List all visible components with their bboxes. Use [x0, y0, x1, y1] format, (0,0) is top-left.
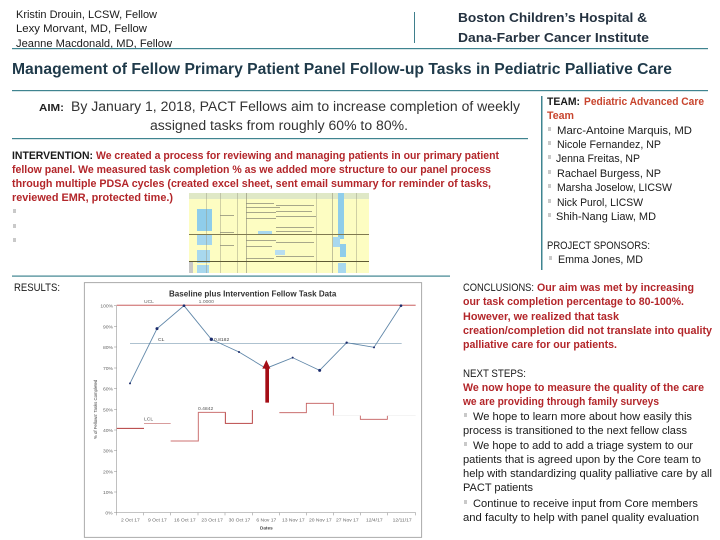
intervention text: reviewed EMR, protected time.) — [12, 192, 173, 204]
title: Management of Fellow Primary Patient Panel Follow-up Tasks in Pediatric Palliative Care — [12, 61, 672, 78]
x axis labels: 2 Oct 17 — [121, 517, 140, 523]
y axis with labels: 100% — [100, 304, 114, 310]
intervention text: through multiple PDSA cycles (created excel sheet, sent email summary for reminder of tasks, — [12, 178, 491, 190]
conclusions: Our aim was met by increasing — [537, 282, 694, 294]
aim statement: By January 1, 2018, PACT Fellows aim to increase completion of weekly — [71, 99, 520, 114]
team list — [547, 96, 704, 223]
x axis labels: 27 Nov 17 — [336, 517, 359, 523]
x axis labels — [121, 517, 412, 531]
y axis with labels: % of Fellows' Tasks Completed — [93, 379, 98, 439]
y axis with labels: 90% — [103, 324, 114, 330]
chart title: Baseline plus Intervention Fellow Task Data — [169, 290, 337, 299]
x axis labels: Dates — [260, 526, 273, 531]
y axis with labels: 20% — [103, 469, 114, 475]
next steps: and faculty to help with panel quality evaluation — [463, 512, 699, 524]
y axis with labels: 30% — [103, 449, 114, 455]
aim statement: AIM: — [39, 103, 64, 114]
y axis with labels: 40% — [103, 428, 114, 434]
authors — [16, 9, 172, 50]
authors: Jeanne Macdonald, MD, Fellow — [16, 38, 172, 50]
upper control limit — [117, 303, 416, 307]
y axis with labels: 0% — [105, 511, 113, 517]
next steps: NEXT STEPS: — [463, 368, 526, 380]
y axis with labels: 10% — [103, 490, 114, 496]
team list: TEAM: — [547, 96, 580, 108]
next steps: PACT patients — [463, 482, 533, 494]
team list: Nicole Fernandez, NP — [557, 139, 661, 151]
x axis labels: 12/11/17 — [393, 517, 412, 523]
data line — [129, 304, 402, 384]
x axis labels: 12/4/17 — [366, 517, 383, 523]
intervention text: INTERVENTION: — [12, 150, 93, 162]
data labels: 0.8182 — [214, 337, 229, 343]
team list: Shih-Nang Liaw, MD — [556, 211, 656, 223]
next steps: process is transitioned to the next fellow class — [463, 425, 687, 437]
next steps: help with standardizing quality palliative care by all — [463, 468, 712, 480]
task spreadsheet thumbnail — [189, 193, 369, 273]
next steps: We hope to add to add a triage system to our — [473, 440, 693, 452]
x axis labels: 23 Oct 17 — [201, 517, 223, 523]
team list: Team — [547, 110, 574, 122]
intervention text: fellow panel. We measured task completion % as we added more structure to our panel process — [12, 164, 491, 176]
x axis labels: 30 Oct 17 — [229, 517, 251, 523]
team list: Marc-Antoine Marquis, MD — [557, 125, 692, 137]
conclusions — [463, 282, 713, 351]
next steps: patients that is agreed upon by the Core team to — [463, 454, 701, 466]
institution heading — [458, 10, 649, 45]
x axis labels: 13 Nov 17 — [282, 517, 305, 523]
next steps: we are providing through family surveys — [462, 396, 659, 408]
project sponsors: Emma Jones, MD — [558, 254, 643, 266]
y axis with labels: 60% — [103, 387, 114, 393]
y axis with labels: 50% — [103, 407, 114, 413]
data labels — [144, 299, 229, 423]
intervention text: We created a process for reviewing and managing patients in our primary patient — [96, 150, 499, 162]
data labels: 0.4842 — [198, 406, 213, 412]
next steps: We now hope to measure the quality of the care — [463, 382, 704, 394]
x axis labels: 9 Oct 17 — [148, 517, 167, 523]
y axis with labels — [93, 304, 416, 517]
aim statement: assigned tasks from roughly 60% to 80%. — [150, 118, 408, 133]
intervention text — [12, 150, 499, 242]
next steps: We hope to learn more about how easily this — [473, 411, 692, 423]
team list: Nick Purol, LICSW — [557, 197, 644, 209]
conclusions: However, we realized that task — [463, 311, 620, 323]
data labels: 1.0000 — [199, 299, 214, 305]
lower control limit steps — [117, 403, 416, 441]
project sponsors: PROJECT SPONSORS: — [547, 240, 650, 252]
y axis with labels: 70% — [103, 366, 114, 372]
chart: baseline plus intervention fellow task data — [84, 283, 422, 537]
center line — [130, 342, 402, 344]
authors: Lexy Morvant, MD, Fellow — [16, 23, 147, 35]
team list: Pediatric Advanced Care — [584, 96, 704, 108]
conclusions: creation/completion did not translate into quality — [463, 325, 713, 337]
institution heading: Boston Children’s Hospital & — [458, 10, 647, 25]
x axis labels: 6 Nov 17 — [256, 517, 277, 523]
authors: Kristin Drouin, LCSW, Fellow — [16, 9, 157, 21]
team list: Jenna Freitas, NP — [556, 153, 640, 165]
team list: Rachael Burgess, NP — [557, 168, 661, 180]
data labels: LCL — [144, 417, 153, 423]
next steps — [462, 368, 712, 524]
institution heading: Dana-Farber Cancer Institute — [458, 30, 649, 45]
arrow: intervention start — [262, 360, 270, 403]
project sponsors — [547, 240, 650, 266]
data labels: UCL — [144, 299, 154, 305]
conclusions: CONCLUSIONS: — [463, 282, 534, 294]
y axis with labels: 80% — [103, 345, 114, 351]
results label: RESULTS: — [14, 282, 60, 294]
data labels: CL — [158, 337, 165, 343]
x axis labels: 16 Oct 17 — [174, 517, 196, 523]
conclusions: palliative care for our patients. — [463, 339, 617, 351]
next steps: Continue to receive input from Core members — [473, 498, 698, 510]
aim statement — [39, 99, 520, 133]
team list: Marsha Joselow, LICSW — [557, 182, 673, 194]
x axis labels: 20 Nov 17 — [309, 517, 332, 523]
conclusions: our task completion percentage to 80-100%. — [463, 296, 684, 308]
